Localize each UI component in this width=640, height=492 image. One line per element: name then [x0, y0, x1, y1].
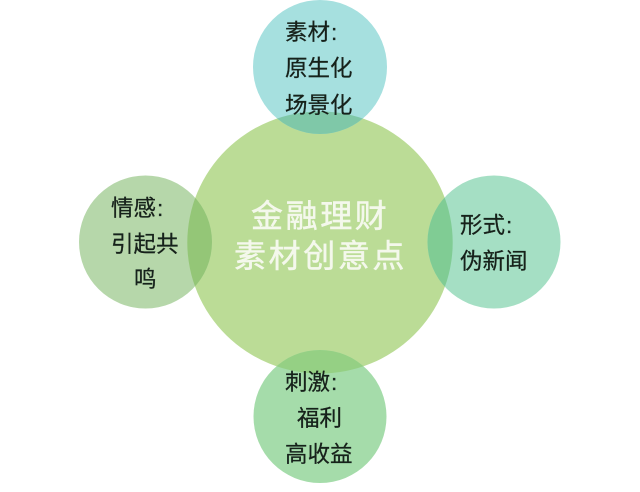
central title: 金融理财 [251, 198, 389, 234]
central title: 素材创意点 [234, 238, 407, 274]
text: emotion: 引起共 [111, 232, 179, 257]
central title [234, 198, 407, 274]
text: stimulus: 福利 [297, 406, 342, 431]
text: emotion: 情感: [111, 196, 163, 221]
text: material [285, 20, 353, 118]
text: material: 场景化 [285, 93, 353, 118]
text: emotion: 鸣 [134, 267, 157, 292]
bottom circle: stimulus [254, 350, 386, 483]
text: material: 素材: [285, 20, 337, 45]
text: stimulus [285, 370, 353, 467]
text: form: 伪新闻 [460, 249, 528, 274]
text: stimulus: 高收益 [285, 442, 353, 467]
text: form [460, 213, 528, 274]
text: emotion [111, 196, 179, 292]
central circle [187, 112, 453, 374]
text: form: 形式: [460, 213, 512, 238]
text: stimulus: 刺激: [285, 370, 337, 395]
left circle: emotion [79, 176, 212, 308]
text: material: 原生化 [285, 56, 353, 81]
top circle: material [253, 0, 387, 134]
right circle: form [428, 176, 560, 308]
